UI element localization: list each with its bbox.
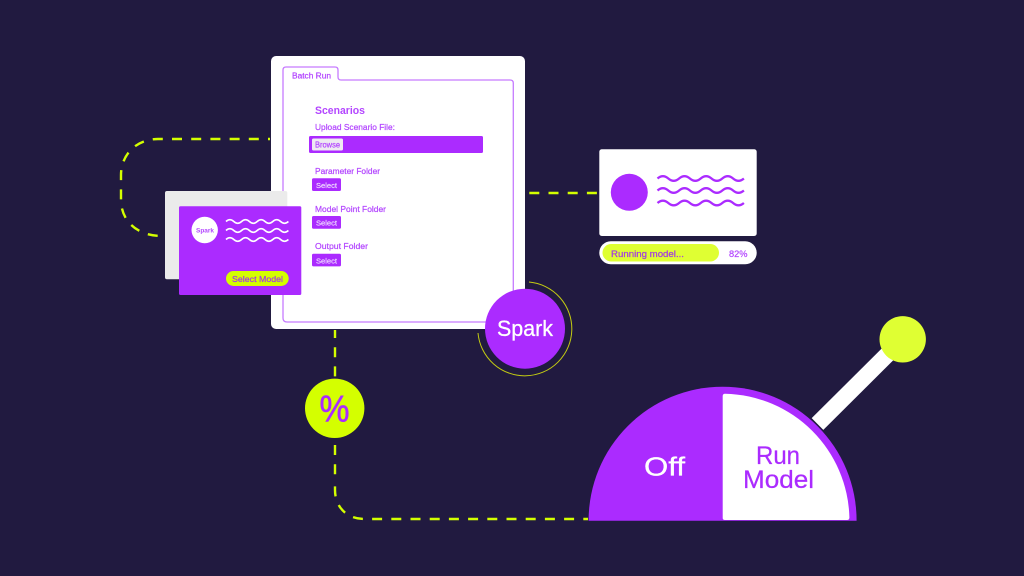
label: run model <box>743 442 814 494</box>
label: off: Off <box>644 454 686 482</box>
wavy text lines <box>226 220 288 241</box>
dashed connector: batch run to percent badge <box>334 330 336 385</box>
purple dot <box>611 174 648 211</box>
badge: percent: % <box>320 388 350 430</box>
select button: model point <box>312 216 341 229</box>
file input bar: Browse <box>315 141 341 150</box>
progress bar: Running model... <box>611 249 684 260</box>
select button: parameter: Select <box>316 181 338 190</box>
lever <box>818 316 926 424</box>
label: parameter folder: Parameter Folder <box>315 166 380 176</box>
run model segment <box>723 394 849 520</box>
select button: model point: Select <box>316 219 338 228</box>
select button: parameter <box>312 178 341 191</box>
panel: grey back card <box>165 191 287 279</box>
tab outline <box>283 67 513 322</box>
wavy text lines <box>658 176 744 205</box>
dashed connector: percent badge to corner <box>334 445 336 475</box>
badge: spark logo: Spark <box>196 228 214 234</box>
select button: output: Select <box>316 256 338 265</box>
panel: output card <box>599 149 757 236</box>
label: run model: Model <box>743 466 814 494</box>
label: run model: Run <box>756 442 800 470</box>
progress bar: 82% <box>729 249 748 260</box>
progress bar <box>599 241 757 264</box>
label: output folder: Output Folder <box>315 241 368 251</box>
panel: batch run window <box>271 56 525 329</box>
badge: percent <box>305 379 364 438</box>
label: model point folder: Model Point Folder <box>315 204 386 214</box>
label: upload scenario file: Upload Scenario File: <box>315 122 395 132</box>
select button: output <box>312 254 341 266</box>
button: select model: Select Model <box>232 274 283 284</box>
heading: scenarios: Scenarios <box>315 105 365 117</box>
dashed connector: batch run to output card <box>529 192 598 194</box>
panel: select model card <box>179 206 301 295</box>
dashed connector: batch run to model card <box>121 139 270 236</box>
file input bar <box>309 136 483 153</box>
badge: spark: Spark <box>497 316 554 341</box>
dashed connector: corner to switch <box>335 484 588 519</box>
switch dome <box>589 387 857 521</box>
tab label: Batch Run <box>292 71 331 80</box>
badge: spark <box>478 282 572 376</box>
